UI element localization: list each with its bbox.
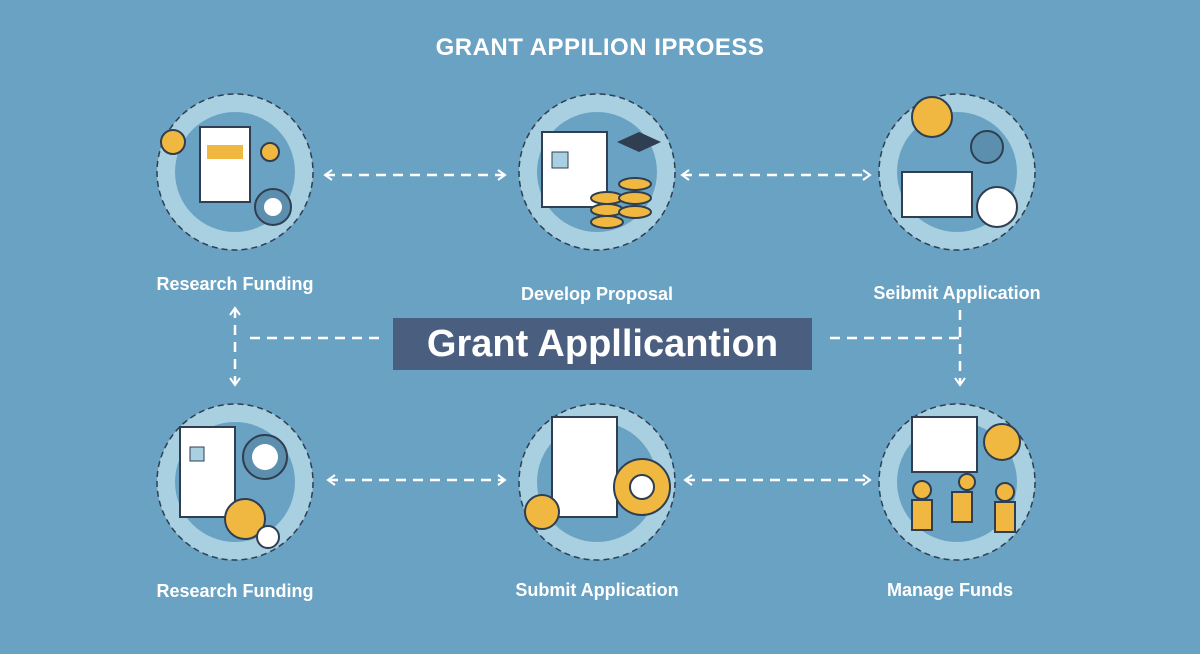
text: Submit Application (515, 580, 679, 600)
labels: Research Funding (156, 274, 314, 294)
center banner: Grant Appllicantion (427, 323, 778, 365)
arrows (235, 175, 870, 480)
text: Seibmit Application (873, 283, 1041, 303)
center banner (393, 318, 812, 370)
text: Research Funding (156, 581, 314, 601)
text: Develop Proposal (521, 284, 673, 304)
title: GRANT APPILION IPROESS (436, 34, 764, 61)
text: Manage Funds (887, 580, 1013, 600)
circles (157, 94, 1035, 560)
